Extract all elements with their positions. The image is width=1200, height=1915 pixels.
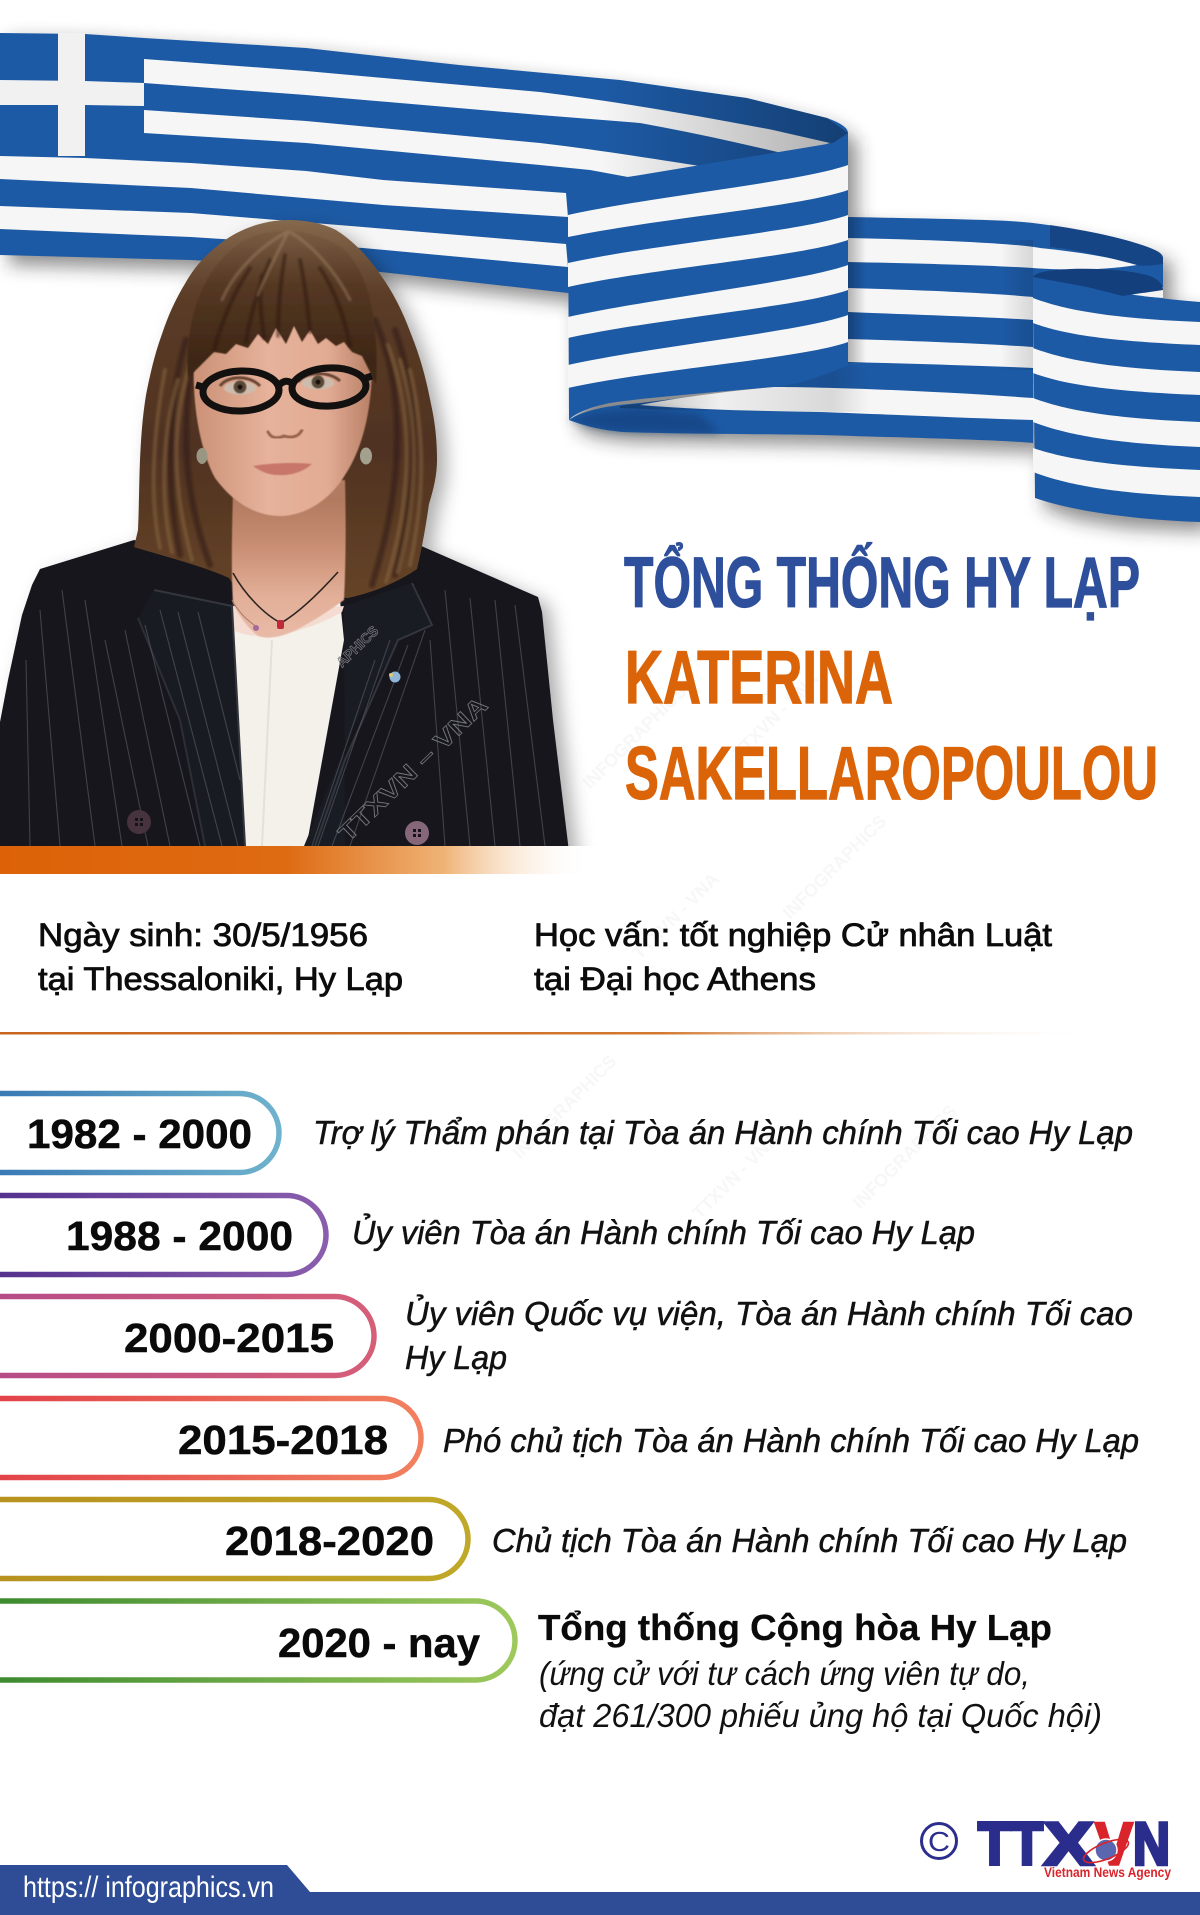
faint watermarks: INFOGRAPHICS	[509, 1051, 620, 1163]
TTXVN logo: N	[1133, 1810, 1170, 1878]
TTXVN logo: V	[1095, 1810, 1133, 1878]
TTXVN logo: Vietnam News Agency	[1044, 1864, 1171, 1880]
title line: katerina: KATERINA	[625, 635, 893, 719]
jacket watermark: APHICS	[333, 623, 381, 670]
greek flag ribbon	[0, 33, 1200, 532]
nose	[268, 430, 302, 438]
ribbon: back right band	[848, 217, 1163, 400]
hair	[134, 220, 437, 598]
ribbon: front right piece	[1033, 269, 1200, 522]
title	[624, 543, 1158, 815]
earrings	[196, 448, 372, 464]
buttons	[127, 810, 429, 845]
copyright symbol: C	[928, 1826, 950, 1857]
timeline row 3: Ủy viên Quốc vụ viện, Tòa án Hành chính Tối cao	[405, 1294, 1133, 1332]
face	[194, 311, 372, 516]
canton cross	[0, 33, 144, 156]
footer bar	[0, 1865, 1200, 1915]
ribbon: lower back band	[569, 363, 1033, 443]
timeline row 2	[0, 1196, 975, 1274]
timeline row 5: 2018-2020	[225, 1518, 434, 1564]
timeline row 1	[0, 1094, 1133, 1172]
faint watermarks: INFOGRAPHICS	[849, 1101, 960, 1213]
ribbon: front fold panel	[568, 132, 848, 420]
timeline row 2: Ủy viên Tòa án Hành chính Tối cao Hy Lạp	[352, 1213, 975, 1251]
copyright symbol	[922, 1824, 956, 1858]
glasses	[196, 366, 372, 412]
lapel pin	[389, 672, 400, 682]
timeline row 5: Chủ tịch Tòa án Hành chính Tối cao Hy Lạp	[492, 1522, 1127, 1559]
birth info: Ngày sinh: 30/5/1956	[38, 917, 368, 953]
necklace	[232, 572, 338, 631]
fringe	[187, 231, 377, 384]
timeline row 6: đạt 261/300 phiếu ủng hộ tại Quốc hội)	[539, 1697, 1102, 1734]
timeline row 4	[0, 1398, 1139, 1478]
timeline row 4: Phó chủ tịch Tòa án Hành chính Tối cao Hy Lạp	[443, 1422, 1139, 1459]
ribbon shadow	[9, 40, 1200, 532]
timeline row 6: 2020 - nay	[278, 1620, 480, 1666]
hair strands	[154, 320, 421, 585]
birth info	[38, 917, 403, 997]
mouth	[253, 463, 312, 475]
faint watermarks: TTXVN - VNA	[629, 869, 723, 963]
education info: tại Đại học Athens	[534, 961, 816, 997]
TTXVN logo: T	[1011, 1810, 1043, 1878]
neck	[232, 480, 346, 638]
pinstripes	[26, 590, 545, 846]
TTXVN logo: T	[978, 1810, 1011, 1878]
faint watermarks: INFOGRAPHICS	[579, 681, 690, 793]
timeline row 3: 2000-2015	[124, 1315, 334, 1361]
timeline row 3: Hy Lạp	[405, 1339, 507, 1376]
divider	[0, 1032, 1100, 1034]
jacket	[0, 540, 570, 860]
timeline row 4: 2015-2018	[178, 1417, 388, 1463]
jacket watermark: TTXVN – VNA	[333, 692, 493, 847]
timeline row 6: (ứng cử với tư cách ứng viên tự do,	[539, 1655, 1030, 1692]
education info	[534, 917, 1052, 997]
timeline row 2: 1988 - 2000	[66, 1213, 293, 1259]
jacket lapels	[138, 583, 432, 846]
portrait	[0, 220, 570, 860]
timeline row 5	[0, 1500, 1127, 1578]
education info: Học vấn: tốt nghiệp Cử nhân Luật	[534, 917, 1052, 953]
TTXVN logo	[978, 1810, 1171, 1880]
shirt	[233, 600, 344, 860]
orange gradient bar	[0, 846, 592, 874]
faint watermarks: INFOGRAPHICS	[779, 811, 890, 923]
footer url: https:// infographics.vn	[23, 1871, 274, 1904]
faint watermarks: TTXVN - VNA	[689, 1129, 783, 1223]
timeline row 3	[0, 1294, 1133, 1376]
TTXVN logo: X	[1044, 1810, 1093, 1878]
ribbon: main band with canton	[0, 33, 848, 293]
timeline row 6	[0, 1601, 1102, 1734]
faint watermarks: TTXVN - VNA	[729, 669, 823, 763]
birth info: tại Thessaloniki, Hy Lạp	[38, 961, 403, 997]
faint watermarks	[509, 669, 960, 1223]
jacket watermark	[333, 623, 493, 847]
timeline row 6: Tổng thống Cộng hòa Hy Lạp	[538, 1607, 1052, 1648]
eyes	[220, 374, 340, 394]
timeline row 1: 1982 - 2000	[27, 1111, 252, 1157]
timeline row 1: Trợ lý Thẩm phán tại Tòa án Hành chính Tối cao Hy Lạp	[313, 1114, 1133, 1151]
